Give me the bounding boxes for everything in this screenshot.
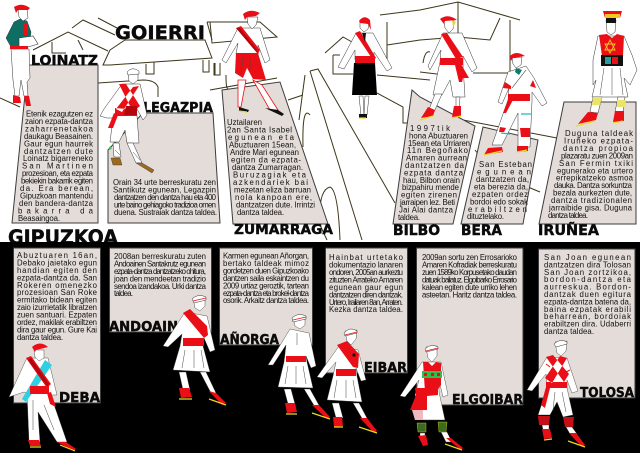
panel: Zumarraga: egunean eta [228, 133, 295, 142]
panel: Tolosa: dantza taldea. [544, 327, 594, 336]
panel: Andoain: taldea. [114, 289, 133, 298]
title: Elgoibar: ELGOIBAR [452, 393, 523, 408]
title: Tolosa: TOLOSA [580, 386, 634, 401]
panel: Elgoibar: zuen 1589ko Korpusetako daudan [422, 268, 517, 277]
panel: Iruñea: Duguna taldeak [565, 129, 633, 138]
panel: Bilbo: 11n Begoñako [407, 146, 469, 155]
panel: Elgoibar: 2009an sortu zen Errosarioko [422, 253, 518, 262]
panel: Loinatz: den bandera-dantza [19, 199, 94, 208]
panel: Zumarraga: Andre Mari egunean [230, 148, 299, 157]
panel: Deba: Debako jaietako egun [17, 258, 97, 267]
panel: Bera: ezpaten ordez [472, 190, 528, 199]
panel: Deba: ordez, makilak erabiltzen [17, 318, 97, 327]
panel: Loinatz: San Martinen [22, 162, 93, 171]
panel: Deba: dantza taldea. [17, 333, 63, 342]
panel: Iruñea: San Fermin txiki [559, 159, 633, 168]
panel: Deba: Abuztuaren 16an, [17, 251, 97, 260]
panel: Zumarraga: Abuztuaren 15ean, [229, 140, 296, 150]
dancer: Elgoibar [400, 345, 463, 450]
dancer: Eibar [317, 329, 377, 433]
panel: Añorga [220, 248, 312, 345]
panel: Añorga: bertako taldeak mimoz [223, 259, 309, 268]
panel: Zumarraga: nola kanpoan ere, [235, 193, 312, 202]
panel: Bera: egunean [477, 168, 531, 176]
panel: Bilbo: taldea. [398, 213, 420, 222]
title: Bera: BERA [461, 223, 502, 239]
dancer: Bera [484, 53, 547, 155]
panel: Iruñea: errepikatzeko asmoa [556, 174, 634, 183]
panel: Andoain: sendoa izandakoa. Urki dantza [114, 282, 207, 291]
panel: Bilbo: hau, Bilbon orain [403, 176, 460, 185]
title: Loinatz: LOINATZ [31, 53, 98, 69]
panel: Bera: eta berezia da, [474, 182, 528, 191]
panel: Andoain: Andoainen Santakrutz egunean [114, 259, 206, 268]
title: Gipuzkoa: GIPUZKOA [8, 226, 118, 249]
panel: Iruñea: Iruñeko ezpata- [564, 136, 633, 146]
title: Añorga: AÑORGA [220, 331, 279, 348]
panel: Deba: prozesioan San Roke [17, 288, 97, 297]
title: Goierri: GOIERRI [115, 22, 205, 44]
panel: Legazpia: dantzatzen den dantza hau eta 400 [114, 193, 217, 202]
panel: Zumarraga: egiten da ezpata- [231, 156, 301, 164]
panel: Legazpia: Santikutz egunean, Legazpin [113, 186, 216, 194]
panel: Loinatz: bekiekin bakarrik egiten [21, 177, 93, 186]
title: Legazpia: LEGAZPIA [143, 100, 214, 116]
panel: Iruñea: bezala aurkezten dute, [553, 189, 632, 198]
panel: Añorga: osorik. Arkaitz dantza taldea. [223, 296, 309, 305]
panel: Zumarraga: Uztailaren [227, 118, 262, 127]
panel: Elgoibar: kalean egiten dute urriko lehen [422, 283, 517, 292]
panel: Iruñea: dantza propioa [563, 144, 634, 153]
panel: Eibar: Kezka dantza taldea. [329, 305, 403, 314]
panel: Loinatz: Gipuzkoan mantendu [20, 192, 93, 200]
panel: Elgoibar: Amaren Kofradiak berreskuratu [422, 260, 517, 270]
panel: Iruñea: dauka. Dantza sorkuntza [554, 181, 633, 190]
panel: Iruñea: dantza taldea. [548, 211, 588, 220]
panel: Elgoibar: datuak baliatuz. Elgoibarko Errosario [422, 275, 518, 284]
panel: Loinatz: zaion ezpata-dantza [25, 117, 94, 126]
panel: Bilbo: jarraipen lez. Beti [399, 198, 455, 207]
title: Iruñea: IRUÑEA [538, 222, 599, 239]
panel: Tolosa: dantzatzen dira Tolosan [544, 260, 631, 269]
panel: Tolosa: San Joan zortzikoa, [544, 268, 631, 277]
panel: Tolosa: ezpata-dantza batena da, [544, 297, 631, 306]
panel: Bera: erabiltzen [468, 205, 527, 214]
panel: Eibar: Hainbat urtetako [329, 253, 404, 262]
panel: Tolosa: erabiltzen dira. Udaberri [544, 320, 631, 329]
title: Zumarraga: ZUMARRAGA [234, 222, 334, 238]
dancer: Bilbo woman [338, 17, 392, 118]
panel: Eibar [326, 248, 408, 373]
panel: Bera [461, 127, 538, 224]
title: Bilbo: BILBO [393, 223, 440, 239]
panel: Zumarraga: dantza taldea. [237, 208, 284, 217]
panel: Añorga: dantzen saila eskaintzen du [223, 274, 309, 283]
panel: Bilbo: ezpata dantza [404, 168, 464, 177]
panel: Bilbo: egiten zirenen [401, 191, 457, 200]
panel: Zumarraga: dantzatzen dute. Irrintzi [236, 200, 315, 210]
panel: Loinatz: da. Era berean, [20, 184, 93, 193]
panel: Loinatz [12, 65, 98, 223]
panel: Bera: dituztelako. [467, 212, 504, 221]
panel: Loinatz: Beasaingoa. [18, 214, 60, 223]
panel: Deba: ezpata-dantza da. San [17, 273, 97, 282]
panel: Andoain: joan den mendeetan tradizio [113, 274, 207, 283]
black lower band [0, 242, 640, 453]
panel: Eibar: ondoren, 2005an aurkeztu [329, 268, 403, 277]
panel: Eibar: egunean gaur egun [329, 283, 403, 292]
panel: Bilbo: Amaren aurrean [406, 154, 467, 163]
panel: Loinatz: daukagu Beasainen. [24, 132, 93, 141]
panel: Añorga: ezpata-dantza eta brokel-dantza [223, 289, 310, 298]
panel: Legazpia: Orain 34 urte berreskuratu zen [113, 178, 216, 187]
panel: Deba: Rokeren omenezko [17, 281, 98, 290]
panel: Iruñea: dantza tradizionalen [551, 196, 632, 205]
panel: Loinatz: dantzatzen dute [24, 147, 93, 156]
panel: Bilbo: dantzatzen da [405, 161, 465, 170]
panel: Elgoibar [416, 248, 523, 405]
panel: Loinatz: bakarra da [18, 206, 94, 215]
title: Deba: DEBA [59, 390, 101, 406]
panel: Añorga: Karmen egunean Añorgan, [223, 252, 309, 260]
panel: Deba: dira gaur egun. Gure Kai [17, 326, 97, 334]
dancer: Loinatz [6, 5, 38, 106]
panel: Bera: dantzatzen da, [476, 175, 529, 184]
panel: Deba: zaio izurrietatik libratzen [17, 303, 97, 312]
panel: Legazpia: duena. Sustraiak dantza taldea. [114, 208, 217, 217]
panel: Loinatz: zaharrenetakoa [25, 124, 94, 133]
dancer: Bilbo man [420, 16, 477, 120]
panel: Eibar: zituzten Arrateko Amaren [329, 275, 403, 284]
panel: Deba: handian egiten den [17, 266, 97, 275]
dancer: Deba [9, 344, 76, 451]
panel: Bilbo: 15ean eta Urriaren [408, 139, 470, 148]
panel: Zumarraga: azkendariek bai [233, 178, 308, 187]
panel: Tolosa: bordon-dantza eta [544, 275, 632, 284]
panel: Tolosa [538, 249, 635, 398]
title: Andoain: ANDOAIN [109, 319, 178, 335]
panel: Bilbo: 1997tik [410, 124, 450, 133]
panel: Añorga: 2009 urtiaz geroztik, tartean [223, 281, 309, 290]
panel: Zumarraga: mezetan eliza barruan [234, 186, 311, 194]
panel: Legazpia: urte baino gehiagoko tradizioa omen [114, 200, 216, 210]
panel: Bilbo [393, 90, 475, 224]
panel: Añorga: gordetzen duen Gipuzkoako [223, 266, 310, 275]
panel: Tolosa: San Joan egunean [544, 253, 631, 262]
panel: Deba: zuen santuari. Ezpaten [17, 311, 97, 320]
dancer: Legazpia [100, 69, 154, 173]
panel: Eibar: Urtero, Irailaren 8an, Arraten. [329, 298, 403, 307]
panel: Legazpia [108, 113, 220, 223]
panel: Bilbo: hona Abuztuaren [409, 131, 468, 140]
panel: Tolosa: baina ezpatak erabili [544, 305, 631, 314]
panel: Iruñea: plazaratu zuen 2009an [561, 151, 633, 160]
panel: Bilbo: Jai Alai dantza [399, 205, 454, 214]
panel: Iruñea: jarraibide gisa. Duguna [548, 204, 633, 212]
dancer: Andoain [163, 295, 226, 405]
title: Eibar: EIBAR [364, 361, 407, 376]
panel: Bilbo: bizpahiru mende [402, 183, 459, 192]
panel: Bera: San Esteban [479, 160, 532, 169]
panel: Loinatz: Etenik ezagutzen ez [26, 110, 93, 118]
panel: Zumarraga: dantza Zumarragan. [232, 163, 303, 172]
dancer: Añorga [268, 314, 330, 419]
panel: Bera: bordoi edo sokak [470, 197, 528, 206]
panel: Tolosa: dantzak duen egitura [544, 290, 632, 299]
dancer: Iruñea [576, 11, 637, 126]
panel: Andoain: ezpata-dantza dantzatzeko ohitura, [114, 267, 206, 276]
panel: Andoain [110, 248, 212, 332]
panel: Eibar: dokumentazio lanaren [329, 260, 403, 270]
panel: Zumarraga [222, 82, 328, 224]
panel: Eibar: dantzatzen diren dantzak. [329, 290, 403, 299]
panel: Iruñea: egunerako eta urtero [557, 166, 634, 175]
panel: Loinatz: Gaur egun haurrek [24, 139, 93, 148]
panel: Elgoibar: asteetan. Haritz dantza taldea. [422, 290, 517, 299]
dancer: Zumarraga [222, 11, 284, 116]
panel: Loinatz: Loinatz bigarreneko [23, 154, 94, 163]
panel: Tolosa: aurreskua. Bordon- [544, 283, 631, 292]
panel: Andoain: 2008an berreskuratu zuten [114, 252, 206, 261]
panel: Deba: ermitako bidean egiten [17, 296, 97, 305]
panel: Deba [14, 248, 100, 403]
panel: Tolosa: beharrean, bordoiak [544, 312, 631, 321]
panel: Zumarraga: 2an Santa Isabel [227, 126, 292, 134]
panel: Iruñea [539, 102, 636, 224]
panel: Zumarraga: Buruzagiak eta [233, 170, 307, 180]
panel: Loinatz: prozesioan, eta ezpata [22, 169, 94, 178]
dancer: Tolosa [527, 340, 585, 447]
